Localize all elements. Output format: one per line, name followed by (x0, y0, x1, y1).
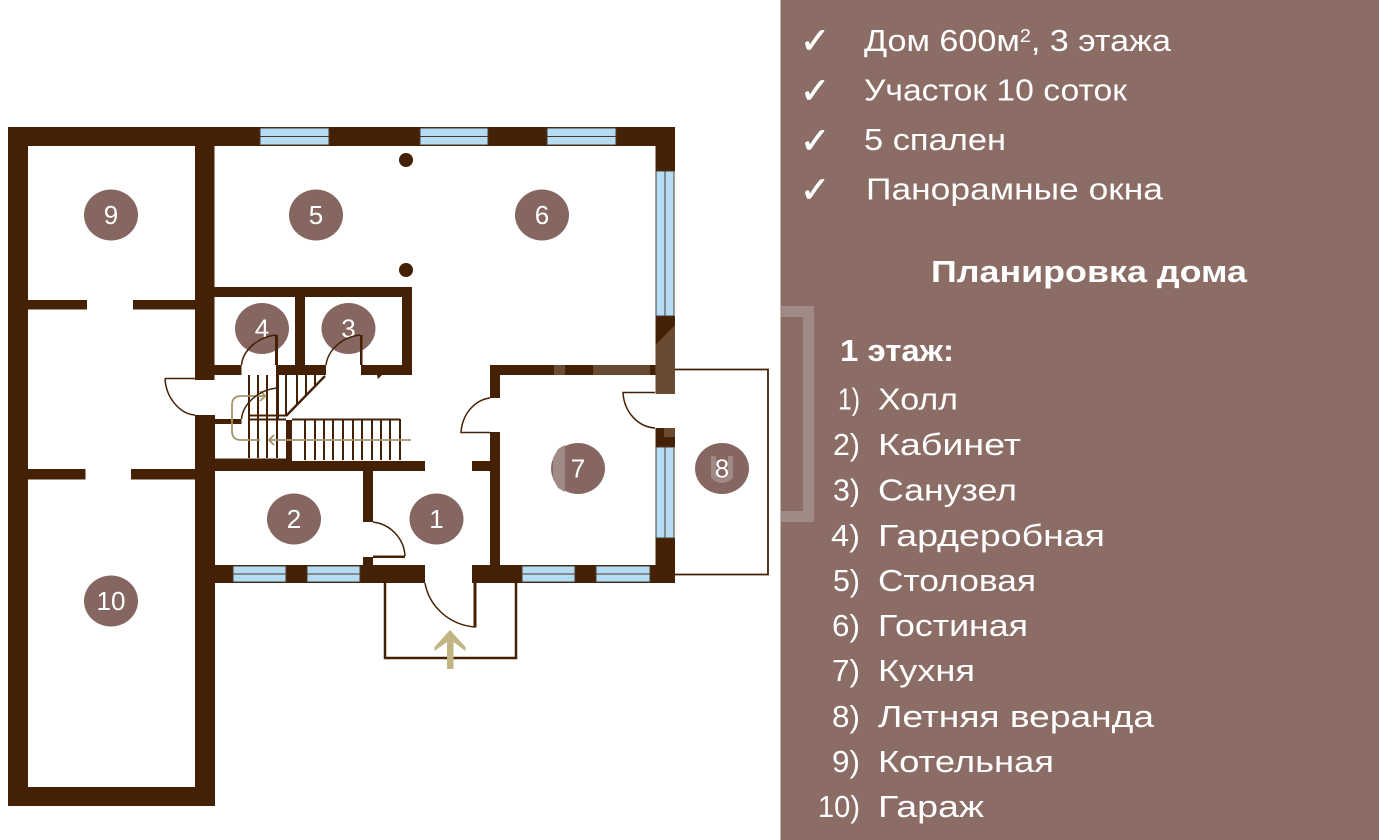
feature checklist: Панорамные окна (866, 172, 1164, 206)
room markers: 8 (715, 454, 729, 484)
room list: Гостиная (878, 608, 1028, 643)
room list: 6) (832, 608, 860, 643)
room markers: 4 (255, 314, 269, 344)
summer veranda outline (675, 370, 768, 574)
room markers: 2 (287, 504, 301, 534)
room list: 3) (833, 472, 860, 508)
room list: Гараж (878, 789, 984, 824)
feature checklist: ✓ (800, 71, 830, 112)
feature checklist: 5 спален (864, 122, 1006, 157)
feature checklist (800, 21, 1172, 211)
room list (818, 382, 1155, 824)
feature checklist: Дом 600м (864, 23, 1006, 58)
watermark traces on walls (554, 325, 675, 437)
room list: 5) (833, 563, 860, 598)
feature checklist: ✓ (800, 170, 830, 211)
feature checklist: , 3 этажа (1031, 23, 1172, 58)
feature checklist: ✓ (800, 21, 830, 62)
room markers: 7 (571, 454, 585, 484)
room list: 10) (818, 789, 860, 824)
room list: Холл (878, 382, 958, 416)
floor plan (8, 127, 768, 806)
room list: Котельная (878, 744, 1054, 779)
room list: Кухня (878, 653, 975, 688)
stair direction arrows (232, 391, 411, 445)
doors (165, 335, 655, 628)
room list: 2) (833, 427, 860, 462)
room markers: 9 (104, 200, 118, 230)
room list: 9) (832, 744, 860, 779)
feature checklist: Участок 10 соток (864, 72, 1127, 108)
room markers: 3 (341, 314, 356, 344)
panel background (780, 0, 1379, 840)
room list: Санузел (878, 472, 1017, 508)
windows (233, 128, 674, 582)
room markers: 1 (429, 504, 444, 534)
watermark frame (781, 306, 814, 522)
heading: floor plan: Планировка дома (931, 254, 1248, 289)
room list: Кабинет (878, 427, 1021, 462)
room markers: 10 (97, 586, 125, 616)
subheading: first floor: 1 этаж: (840, 333, 954, 368)
room list: Летняя веранда (878, 699, 1155, 734)
staircase (249, 375, 400, 460)
outer and inner walls (8, 127, 675, 806)
room list: Гардеробная (878, 518, 1105, 553)
room markers (84, 190, 749, 626)
entrance arrow (434, 630, 466, 669)
columns (399, 153, 413, 277)
entrance porch (385, 583, 516, 658)
room list: 8) (832, 699, 860, 734)
room list: 7) (832, 653, 860, 688)
room list: 1) (838, 382, 860, 416)
info panel (780, 0, 1379, 840)
room list: Столовая (878, 563, 1036, 598)
feature checklist: ✓ (800, 121, 830, 162)
room markers: 5 (309, 200, 323, 230)
room list: 4) (831, 518, 860, 553)
room markers: 6 (535, 200, 549, 230)
feature checklist: 2 (1020, 26, 1031, 46)
